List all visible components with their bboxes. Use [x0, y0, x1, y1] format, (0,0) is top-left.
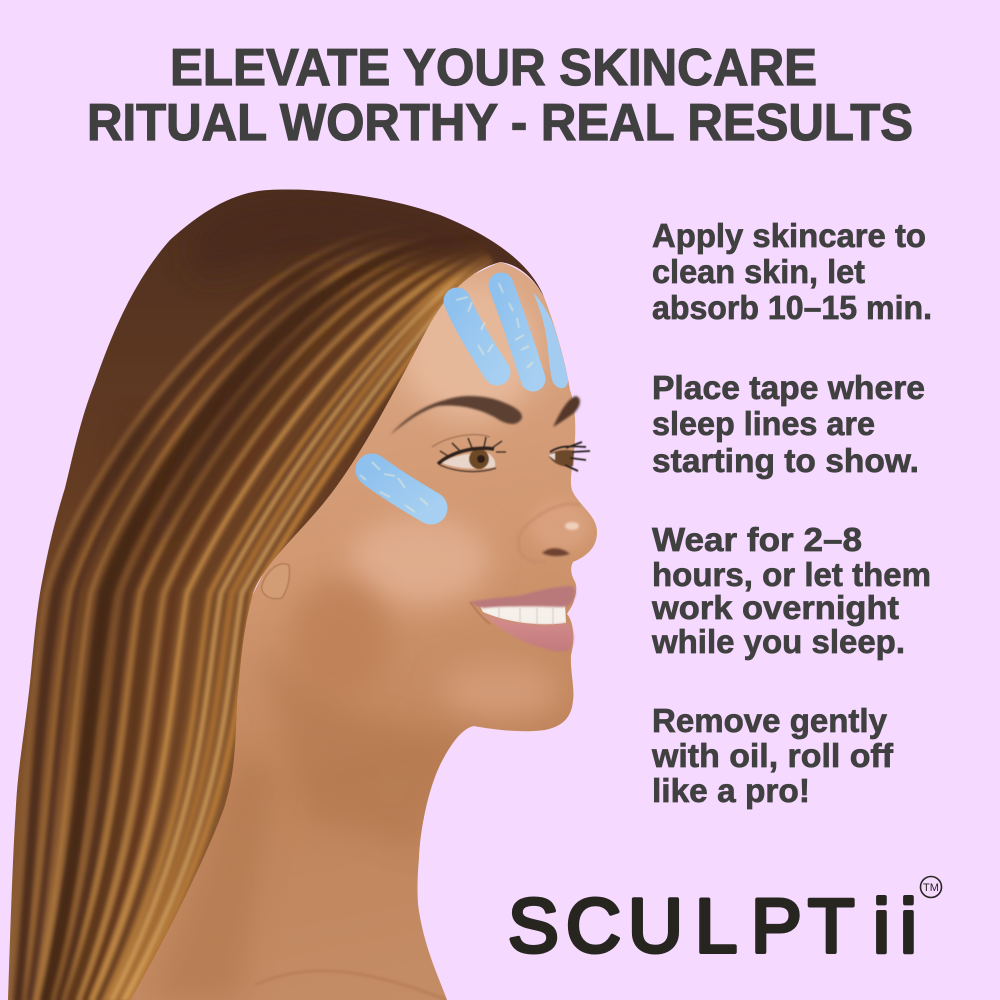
- upper lip: [470, 586, 575, 608]
- step 1: [652, 217, 932, 326]
- eyebrow near: [390, 396, 522, 435]
- tape strip 2: [499, 283, 533, 379]
- forehead strips: [456, 283, 568, 388]
- step 1: absorb 10–15 min.: [652, 289, 932, 326]
- step 1: clean skin, let: [652, 253, 865, 290]
- title: RITUAL WORTHY - REAL RESULTS: [87, 94, 913, 152]
- skin: face and neck: [130, 262, 597, 1000]
- step 4: [651, 702, 894, 809]
- eye far: [548, 442, 590, 471]
- eyebrow far: [553, 396, 580, 427]
- step 4: like a pro!: [652, 772, 810, 809]
- step 3: hours, or let them: [652, 556, 931, 593]
- under-eye strip: [360, 462, 431, 512]
- mouth: [470, 586, 575, 652]
- step 3: [651, 521, 931, 660]
- nose shadow: [542, 522, 579, 556]
- step 4: Remove gently: [652, 702, 888, 739]
- title: ELEVATE YOUR SKINCARE: [170, 39, 817, 97]
- title: [87, 39, 913, 152]
- ear: [262, 564, 290, 599]
- wordmark: SCULPTii: [508, 884, 917, 969]
- step 2: Place tape where: [652, 369, 925, 406]
- trademark badge: [920, 876, 942, 898]
- crown shading: [190, 191, 544, 297]
- instructions text: [651, 217, 932, 809]
- eye near: [432, 435, 506, 472]
- model portrait: [0, 180, 610, 1000]
- step 2: sleep lines are: [652, 405, 875, 442]
- teeth: [480, 604, 566, 624]
- step 1: Apply skincare to: [652, 217, 926, 254]
- hair: [0, 180, 560, 1000]
- tape strip 1: [456, 297, 497, 372]
- tape strip 3: [533, 292, 568, 388]
- step 3: Wear for 2–8: [652, 521, 862, 558]
- step 3: work overnight: [651, 589, 899, 626]
- step 4: with oil, roll off: [651, 737, 894, 774]
- step 2: [652, 369, 925, 479]
- trademark badge: TM: [923, 882, 939, 894]
- step 3: while you sleep.: [651, 623, 905, 660]
- lower lip: [483, 613, 573, 652]
- logo: [508, 876, 942, 969]
- step 2: starting to show.: [652, 442, 919, 479]
